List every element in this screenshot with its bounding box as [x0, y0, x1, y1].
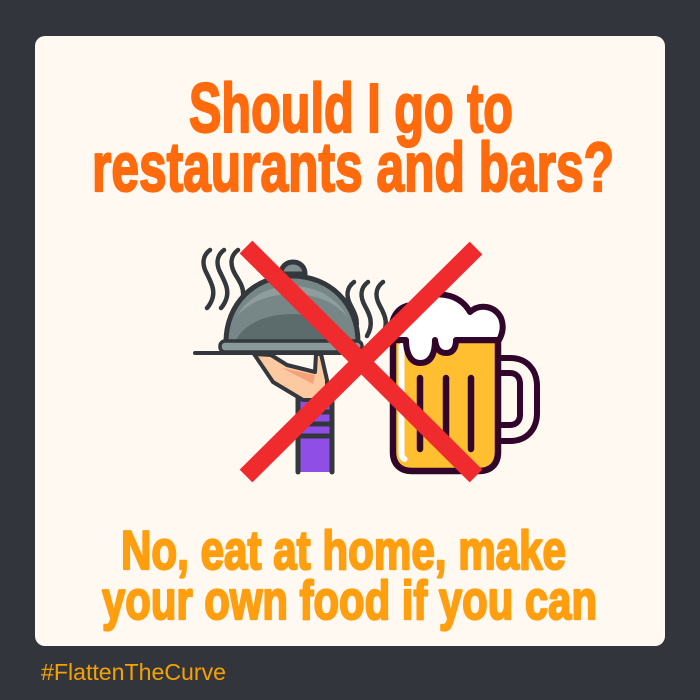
icon: cloche knob — [281, 262, 305, 274]
icon: beer foam — [392, 294, 503, 363]
answer text: No, eat at home, make — [121, 519, 566, 581]
title — [92, 69, 614, 206]
icon: mug handle — [498, 358, 537, 441]
icon: mug body — [393, 340, 498, 471]
icon: beer mug — [392, 294, 537, 471]
icon: steam left — [204, 250, 243, 308]
icon: steam right — [348, 282, 386, 336]
icon: cloche dome — [226, 276, 358, 342]
panel: card — [35, 36, 665, 646]
hashtag: #FlattenTheCurve — [41, 659, 226, 685]
icon: server hand holding cloche — [195, 250, 386, 472]
answer text — [102, 519, 597, 631]
icon: hand — [254, 354, 327, 400]
icon: sleeve — [298, 398, 332, 472]
icon: cloche rim — [220, 341, 362, 352]
icon: mug ridges — [420, 378, 471, 449]
icon: mug highlight — [402, 346, 404, 459]
icon: red cross — [246, 247, 476, 476]
icon: tray line — [195, 351, 368, 355]
title: Should I go to — [189, 69, 513, 147]
